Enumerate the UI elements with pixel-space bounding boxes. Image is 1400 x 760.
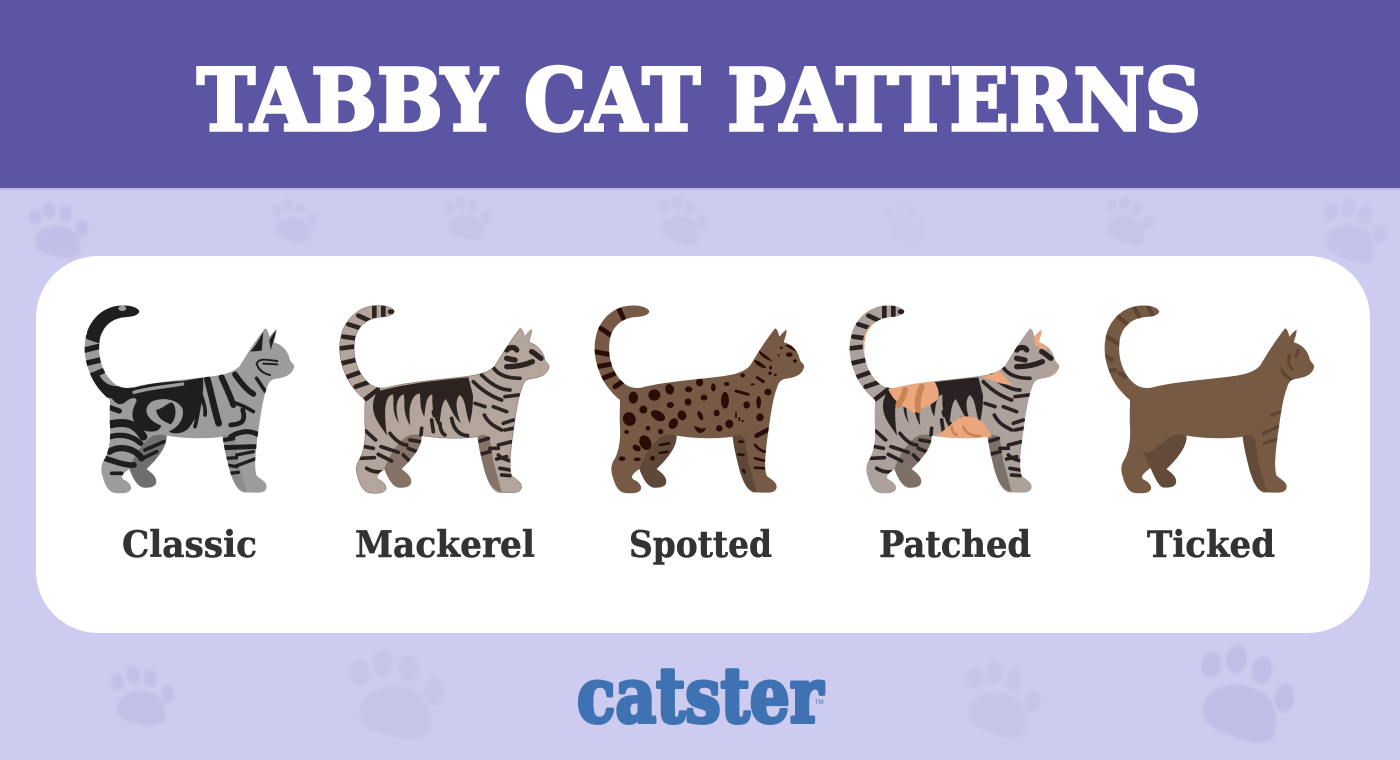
label: classic: Classic <box>122 524 257 566</box>
background paw prints <box>29 193 1391 748</box>
title: TABBY CAT PATTERNS <box>197 51 1201 151</box>
logo: catster: TM <box>815 700 824 706</box>
cat: mackerel <box>340 305 549 493</box>
label: ticked: Ticked <box>1147 524 1275 566</box>
logo: catster: catster <box>577 651 824 740</box>
header band <box>0 0 1400 190</box>
orange patches <box>863 323 1059 438</box>
panel: cat patterns card <box>36 256 1370 633</box>
label: patched: Patched <box>879 524 1031 566</box>
cat: spotted <box>595 305 804 493</box>
label: mackerel: Mackerel <box>355 524 535 566</box>
cat: ticked <box>1105 305 1314 493</box>
cat: classic <box>85 305 294 493</box>
cat: patched <box>850 305 1059 493</box>
label: spotted: Spotted <box>629 524 772 566</box>
